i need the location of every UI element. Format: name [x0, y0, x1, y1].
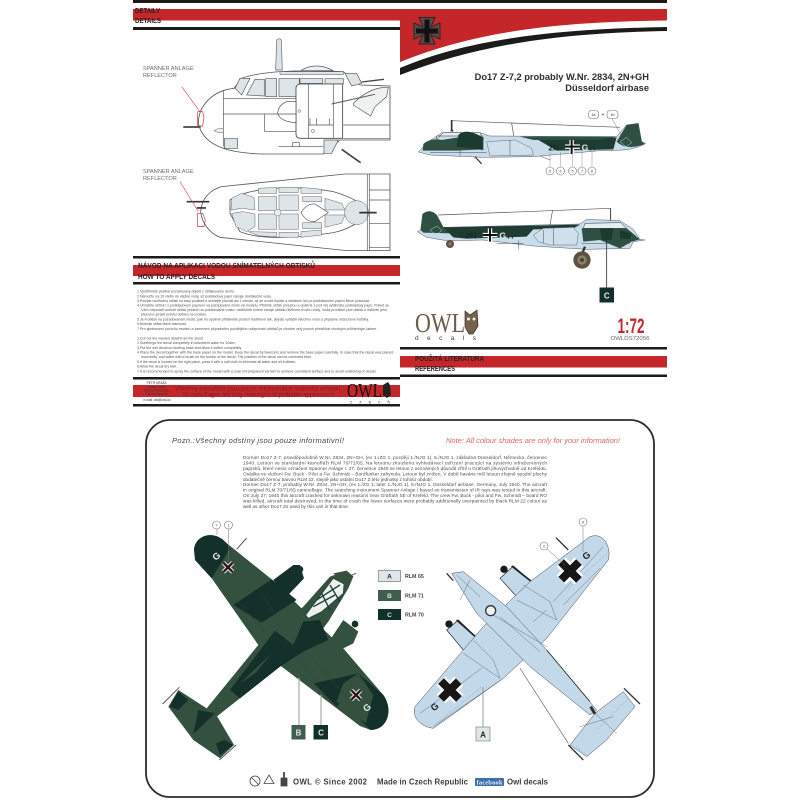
text block: English instructions: 2.Submerge the decal completely in lukewarm water for 10sec. — [137, 340, 236, 345]
text block: English instructions: 3.Put the wet decal on blotting base and allow it soften completely. — [137, 345, 242, 350]
text block: English instructions: incorrectly, add water with a brush on the border of the decal. The position of the decal can be corrected then. — [141, 354, 312, 359]
text block: aircraft history: was killed, aircraft total destroyed. In the time of crash the lower surfaces were probably additionally overpainted by black RLM 22 colour as — [243, 498, 548, 504]
chart: side profile, left-facing aircraft — [418, 120, 646, 164]
legend: RLM colour swatches: RLM 71 — [405, 594, 424, 600]
chart: side profile, right-facing aircraft: G — [499, 231, 506, 241]
chart: side profile, right-facing aircraft: 2N — [466, 231, 477, 241]
text block: English instructions: 5.If the decal is located on the right place, press it with a soft cloth to eliminate all water and air bubbles. — [137, 359, 296, 364]
panel: bottom red band with disclaimer — [133, 377, 400, 406]
footer: Owl decals: Owl decals — [507, 778, 549, 786]
chart: aircraft upper surface camouflage: G — [361, 702, 373, 714]
panel: how to apply decals header band: HOW TO APPLY DECALS — [138, 272, 215, 281]
text block: English instructions: 4.Place the decal together with the base paper on the model. Keep the decal by tweezers and remove the base paper carefully. In case that the decal was placed — [137, 350, 393, 354]
callout: colour C, side profile: C — [604, 292, 610, 300]
logo: OWL decals: OWL — [415, 308, 465, 338]
chart: aircraft upper surface camouflage: G — [210, 550, 222, 563]
legend: RLM colour swatches: C — [387, 612, 392, 619]
panel: details header band: DETAILY — [135, 6, 160, 15]
text: contact address: e-mail: owl@owl.cz — [143, 398, 171, 402]
panel: how to apply decals header band: NÁVOD NA APLIKACI VODOU SNÍMATELNÝCH OBTISKŮ — [138, 260, 315, 270]
callouts: 4a + 4b: 4a — [592, 113, 596, 117]
panel: references header band: POUŽITÁ LITERATURA — [415, 354, 484, 363]
legend: RLM colour swatches: B — [387, 593, 392, 600]
callouts: numbered markers 5 6 5 7 8: 7 — [581, 170, 583, 174]
scale: 1:72: 1:72 — [618, 315, 644, 338]
callouts: numbered markers 5 6 5 7 8: 6 — [560, 170, 562, 174]
callouts: markers 2 and 8 — [540, 518, 587, 565]
callouts: markers 7 and 1: 1 — [228, 524, 230, 528]
callouts: numbered markers 5 6 5 7 8: 5 — [572, 170, 574, 174]
text block: Czech instructions: 2.Namočte na 10 vteřin do vlažné vody, až podkladový papír nasaje dostatečně vodu. — [137, 294, 272, 298]
callouts: 4a + 4b: + — [601, 112, 605, 118]
footer: copyright: OWL © Since 2002 — [293, 778, 368, 786]
callouts: numbered markers 5 6 5 7 8: 8 — [591, 170, 593, 174]
chart: side profile, left-facing aircraft: G — [582, 143, 589, 153]
text block: aircraft history: paprsků, které nesio označení Spanner Anlage I. 27. července 1940 se letoun z neznámých důvodů zřítil u Gräfrath jihovýchodně od Krefeldu. — [243, 465, 547, 471]
callouts: colour B and C on upper surface: C — [318, 728, 324, 738]
text block: Czech instructions: Vám nepodaří umístit obtisk přesně na požadované místo, navlhčete kolem okraje obtisku štětcem trochu vody. Voda pronikne pod obtisk a můžete jeho — [141, 307, 388, 312]
panel: bottom red band with disclaimer: All camuflages are only redesigns of probable appearance. — [182, 392, 336, 398]
icon: iron cross — [414, 18, 440, 44]
text block: English instructions: 7.It is recommended to spray the surface of the model with a coat of transparent varnish to achieve consistent surface and to avoid unsticking of decals. — [137, 368, 377, 374]
text block: English instructions: 1.Cut out the needed detail from the sheet. — [137, 336, 204, 340]
callouts: colour B and C on upper surface — [292, 678, 328, 740]
icons: recycling and safety symbols — [250, 772, 287, 786]
chart: aircraft upper surface camouflage — [163, 535, 388, 760]
text: contact address: Hůrka 1234 — [148, 385, 165, 389]
callouts: 4a + 4b — [588, 110, 621, 135]
label: spanner anlage reflector, top view: SPANNER ANLAGE — [143, 169, 194, 175]
callouts: 4a + 4b: 4b — [610, 113, 614, 117]
chart: side profile, right-facing aircraft: H — [507, 231, 514, 241]
panel: right page red swoosh header — [400, 9, 667, 75]
callout: colour A on lower surface: A — [480, 730, 486, 740]
callouts: markers 7 and 1: 7 — [216, 524, 218, 528]
panel: references header band — [400, 347, 667, 377]
text block: Czech instructions: 3.Položte navlhčený obtisk na savý podklad a nechejte působit asi 1 minutu, až se uvolní lepidlo a obtiskem lze po podkladovém papíru lehce posouvat. — [137, 298, 370, 303]
text block: aircraft history: On July 27, 1940 this aircraft crashed for unknown reasons near Gräfrath SE of Krefeld. The crew Fw. Buck - pilot and Fw. Schmidt – board RO — [243, 493, 547, 498]
text block: aircraft history: dodatečně černou barvou RLM 22, stejně jako ostatní Do17 Z této jednotky z tohoto období. — [243, 477, 433, 482]
panel: references header band: REFERENCES — [415, 364, 455, 373]
callouts: markers 2 and 8: 8 — [582, 520, 584, 524]
panel: bottom red band with disclaimer: Všechny kamufláže jsou pouze rekonstrukce možného vzhledu. — [175, 386, 342, 392]
legend: RLM colour swatches: A — [387, 574, 392, 580]
chart: aircraft lower surface: G — [429, 701, 441, 713]
text: contact address: 530 02 Pardubice — [144, 388, 169, 392]
text block: Czech instructions: 1.Vystřihněte pečlivě požadovaný objekt z obtiskového archu. — [137, 288, 235, 294]
text block: aircraft history: 1940. Letoun ve standardní kamufláži RLM 70/71/65. Na letounu zkoušeno vyhledávací zařízení pracující na systému infračervených — [243, 460, 547, 466]
footer: made in Czech Republic: Made in Czech Republic — [377, 778, 469, 786]
chart: aircraft lower surface — [414, 536, 640, 760]
logo: OWL czech: c z e c h — [350, 400, 390, 404]
callouts: numbered markers 5 6 5 7 8: 5 — [549, 170, 551, 174]
chart: aircraft lower surface: G — [580, 550, 592, 562]
title: airbase: Düsseldorf airbase — [565, 83, 649, 93]
legend: RLM colour swatches — [378, 570, 424, 620]
legend: RLM colour swatches: RLM 65 — [405, 574, 424, 580]
panel: detail top view of nose — [180, 174, 390, 251]
text block: aircraft history: well as other Do17 Zs used by this unit in that time. — [243, 504, 349, 509]
chart: side profile, right-facing aircraft — [417, 208, 645, 288]
panel: details header band: DETAILS — [135, 16, 161, 25]
callout: colour A on lower surface — [476, 687, 490, 741]
chart: side profile, left-facing aircraft: 2N — [548, 143, 559, 153]
callouts: markers 7 and 1 — [212, 521, 232, 562]
text block: aircraft history: Dornier Do17 Z-7, pravděpodobně W.Nr. 2834, 2N+GH, (ex 1./ZG 1, později 1./NJG 1), 5./NJG 1, základna Düsseldorf, Německo, červenec — [243, 455, 548, 460]
panel: details header band — [133, 0, 667, 30]
label: spanner anlage reflector, top view: REFLECTOR — [143, 176, 177, 182]
text: contact address: Czech Republic — [145, 392, 168, 396]
callouts: colour B and C on upper surface: B — [296, 728, 302, 738]
logo: OWL decals: d e c a l s — [415, 335, 477, 342]
chart: side profile, left-facing aircraft: H — [589, 143, 596, 153]
callouts: numbered markers 5 6 5 7 8 — [546, 150, 596, 175]
text: contact address: PETR KRAŽA — [147, 380, 168, 385]
text block: aircraft history: in original RLM 70/71/65 camouflage. The searching instrument Spanner Anlage I based on transmission of IR rays was tested in this aircraft. — [243, 488, 547, 492]
text block: Czech instructions: 5.Je-li obtisk na požadovaném místě, pak ho opatrně přitiskněte prstem hadříkem tak, abyste vytlačili všechnu vodu a případné vzduchové bubliny. — [137, 316, 369, 322]
note: English colour notice: Note: All colour shades are only for your information! — [446, 436, 621, 445]
title: aircraft name: Do17 Z-7,2 probably W.Nr. 2834, 2N+GH — [475, 72, 649, 82]
label: spanner anlage reflector, side view: REFLECTOR — [143, 73, 177, 79]
text block: Czech instructions: přesnou upravit polohu obtisku na modelu. — [141, 312, 207, 316]
text block: English instructions: 6.Allow the decal dry well. — [137, 364, 177, 368]
text block: aircraft history: Osádka ve složení Fw. Buck - Pilot a Fw. Schmidt – Bordfunker zahynula. Letoun byl zničen. V době havárie měl letoun zřejmě spodní plochy — [243, 472, 548, 476]
note: Czech colour notice: Pozn.:Všechny odstíny jsou pouze informativní! — [172, 436, 345, 445]
logo: OWL czech: OWL — [347, 380, 382, 402]
legend: RLM colour swatches: RLM 70 — [405, 612, 424, 618]
text: product code: OWLDS72056 — [610, 336, 650, 342]
label: spanner anlage reflector, side view: SPANNER ANLAGE — [143, 66, 194, 72]
text block: Czech instructions: 6.Nechejte obtisk řádně zaschnout. — [137, 321, 187, 326]
footer: facebook badge: facebook — [476, 779, 503, 786]
text block: Czech instructions: 4.Umístěte obtisk i s podkladovým papírem na požadované místo na modelu. Přidržte obtisk pinzetou a opatrně z pod něj vytáhněte podkladový papír. Pokud se — [137, 302, 390, 308]
text block: aircraft history: Dornier Do17 Z-7, probably W.Nr. 2834, 2N+GH, (ex 1./ZG 1, later 1./NJG 1), 5./NJG 1, Düsseldorf airbase, Germany, July 1940. The aircraft — [243, 482, 548, 487]
panel: detail side view of nose — [182, 39, 390, 163]
text block: Czech instructions: 7.Pro sjednocení povrchu modelu a zamezení případného pozdějšího odlepování obtisků je vhodné celý povrch přestříkat vhodným průhledným lakem. — [137, 326, 377, 331]
callout: colour C, side profile — [600, 288, 614, 302]
panel: how to apply decals header band — [133, 256, 400, 284]
callouts: markers 2 and 8: 2 — [543, 544, 545, 548]
panel: camouflage scheme frame — [146, 420, 654, 797]
